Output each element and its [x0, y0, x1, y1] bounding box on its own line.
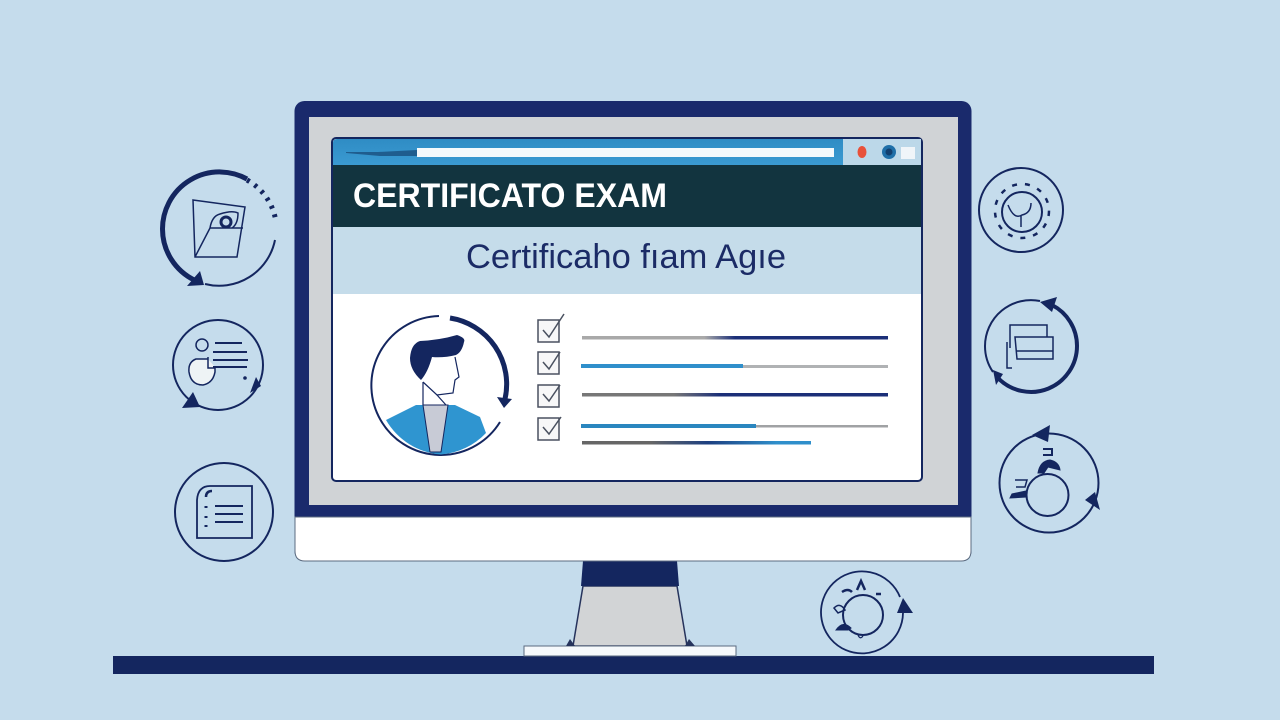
progress lines [581, 336, 888, 444]
monitor stand [524, 561, 736, 656]
icon: stacked documents cycle [985, 297, 1077, 392]
progress arrow [450, 318, 507, 399]
item 4 [538, 417, 561, 440]
subtitle band: Certificaho fıam Agıe [466, 238, 786, 276]
item 3 [538, 385, 560, 407]
icon: ring cycle [1000, 425, 1100, 532]
subtitle band [333, 227, 921, 294]
icon: document cycle [162, 172, 276, 286]
avatar [371, 316, 512, 455]
title band: CERTIFICATO EXAM [353, 177, 667, 215]
icon: gear clock [979, 168, 1063, 252]
item 2 [538, 352, 560, 374]
title band [333, 165, 921, 227]
item 1 [538, 314, 564, 342]
icon: bottom ring cycle [821, 571, 913, 653]
desk bar [113, 656, 1154, 674]
checklist [538, 314, 564, 440]
icon: profile list cycle [173, 320, 263, 410]
icon: list document [175, 463, 273, 561]
browser screen [332, 138, 922, 481]
monitor [294, 101, 972, 561]
browser toolbar [333, 139, 921, 165]
